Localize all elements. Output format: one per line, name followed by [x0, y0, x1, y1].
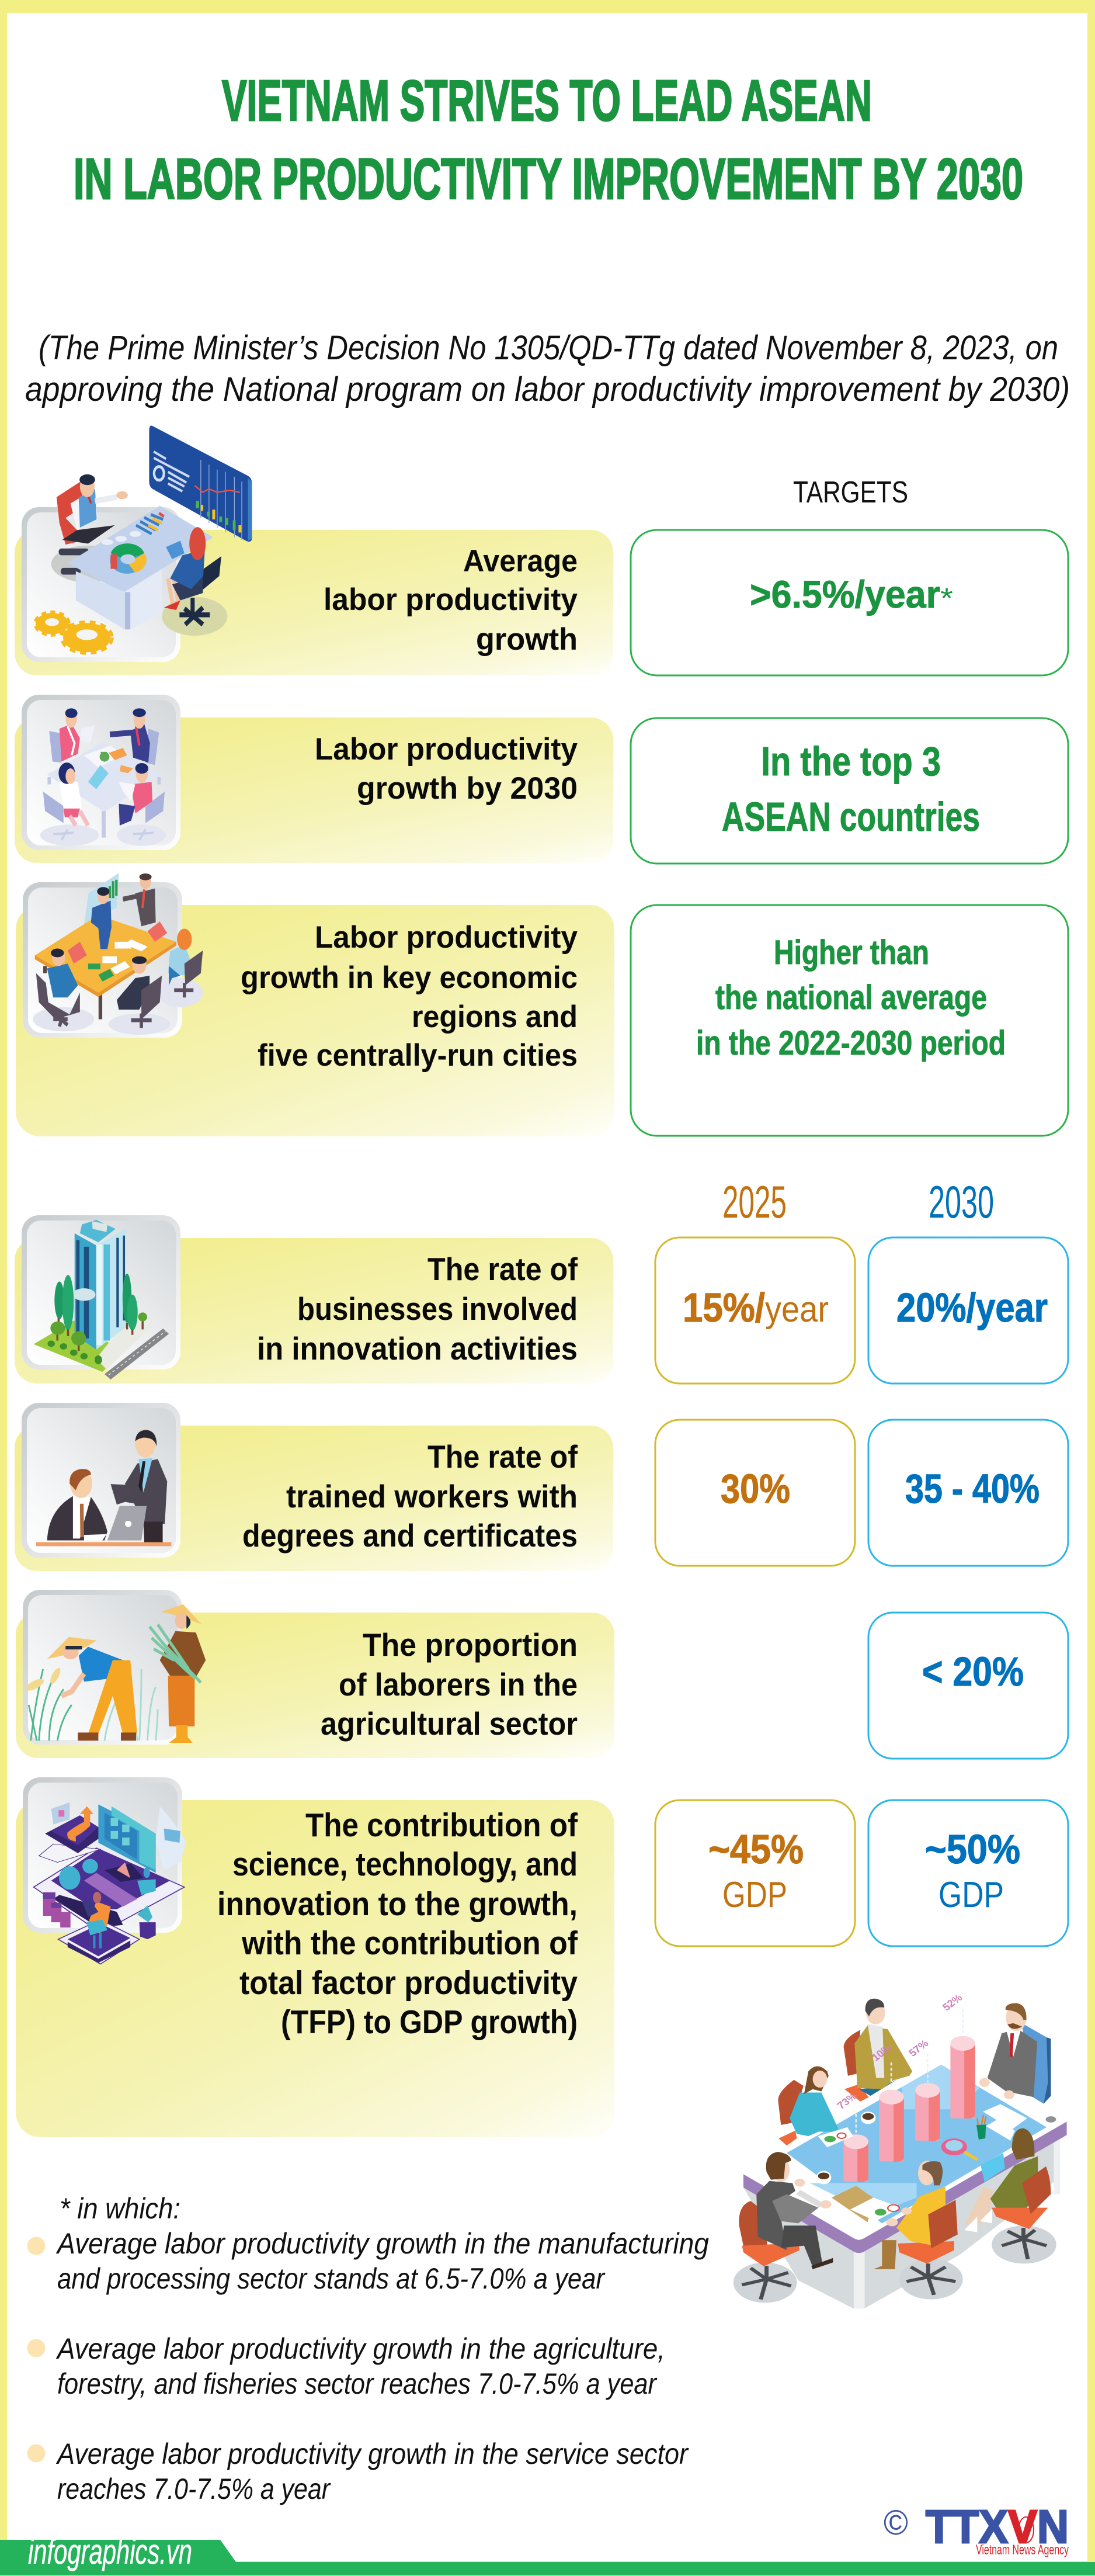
label text: The rate of — [427, 1438, 578, 1475]
target box: top 3 in ASEAN: In the top 3 — [761, 739, 941, 784]
percent labels: 10% — [868, 2043, 895, 2062]
footnote: service sector: reaches 7.0-7.5% a year — [57, 2473, 331, 2505]
footnote: agriculture sector: Average labor productivity growth in the agriculture, — [55, 2332, 665, 2365]
panel: businesses in innovation — [15, 1215, 613, 1384]
bullet — [27, 2339, 46, 2357]
value box: 15 percent per year in 2025 — [655, 1237, 855, 1384]
label text: labor productivity — [324, 583, 578, 617]
label text — [321, 1627, 578, 1742]
label text: of laborers in the — [339, 1666, 578, 1703]
column headings: 2025 and 2030 — [722, 1176, 994, 1228]
footnote: agriculture sector — [27, 2332, 665, 2400]
label text: innovation to the growth, — [217, 1885, 578, 1923]
label text: five centrally-run cities — [258, 1038, 578, 1073]
target box: over 6.5 percent — [631, 530, 1068, 675]
value box: about 50 percent GDP in 2030: ~50% — [925, 1826, 1020, 1872]
label text — [217, 1807, 578, 2041]
footer band: infographics.vn — [0, 2532, 1095, 2575]
panel: average labor productivity growth — [15, 426, 613, 675]
footnote heading: * in which: — [60, 2192, 180, 2225]
value box: 15 percent per year in 2025: year — [765, 1289, 829, 1330]
illustration: business team around data table — [734, 1992, 1067, 2308]
percent labels: 52% — [939, 1992, 965, 2012]
column headings: 2025 and 2030: 2030 — [929, 1176, 994, 1228]
data cylinders — [844, 2036, 975, 2182]
panel: laborers in agriculture — [16, 1590, 614, 1758]
footer band: infographics.vn: infographics.vn — [28, 2532, 192, 2571]
chair and man at front left — [739, 2152, 833, 2300]
label text: degrees and certificates — [242, 1517, 578, 1554]
label text — [241, 920, 578, 1073]
value box: 35 to 40 percent in 2030: 35 - 40% — [905, 1466, 1040, 1511]
label text: trained workers with — [286, 1478, 578, 1514]
chair and man at right — [979, 2003, 1051, 2104]
label text: total factor productivity — [239, 1964, 578, 2002]
icon card: digital technology platform — [23, 1777, 186, 1964]
icon card: office desk with dashboard — [22, 426, 252, 662]
percent labels: 57% — [905, 2038, 931, 2058]
footnote: manufacturing sector — [27, 2227, 709, 2295]
label text: Labor productivity — [315, 920, 578, 955]
icon card: rice farmers — [23, 1590, 206, 1745]
label text — [315, 732, 578, 806]
label text: The proportion — [363, 1627, 578, 1663]
chair and man at front — [873, 2161, 958, 2295]
value box: 30 percent in 2025: 30% — [721, 1466, 790, 1511]
label text: in innovation activities — [257, 1330, 578, 1367]
target box: over 6.5 percent: >6.5%/year — [750, 573, 940, 616]
value box: about 45 percent GDP in 2025: GDP — [722, 1875, 787, 1915]
label text: Labor productivity — [315, 732, 578, 767]
value box: about 45 percent GDP in 2025 — [655, 1800, 855, 1946]
value box: about 45 percent GDP in 2025: ~45% — [708, 1826, 804, 1872]
target box: over 6.5 percent: * — [940, 583, 953, 614]
panel: science, technology and innovation contribution — [16, 1777, 614, 2137]
label text — [324, 544, 578, 657]
label text: science, technology, and — [232, 1846, 578, 1883]
label text: agricultural sector — [321, 1705, 578, 1742]
label text — [242, 1438, 578, 1554]
chair and woman at back left — [778, 2067, 839, 2145]
column headings: 2025 and 2030: 2025 — [722, 1176, 787, 1228]
footnote: service sector: Average labor productivity growth in the service sector — [55, 2438, 689, 2470]
heading: targets: TARGETS — [793, 476, 908, 509]
label text: businesses involved — [297, 1291, 578, 1327]
logo: TTXVN Vietnam News Agency — [884, 2501, 1069, 2558]
label text: growth by 2030 — [357, 771, 578, 806]
label text: with the contribution of — [241, 1925, 578, 1962]
icon card: planning meeting at yellow table — [23, 873, 203, 1038]
subtitle: decision reference — [25, 329, 1070, 408]
chair and man at back — [844, 1999, 912, 2102]
panel: growth in key economic regions — [16, 873, 614, 1136]
label text: Average — [463, 544, 578, 578]
table items: cups, papers, magnifier, pencils — [798, 2104, 1056, 2222]
value box: under 20 percent in 2030 — [868, 1613, 1068, 1759]
percent labels: 73% — [834, 2090, 860, 2111]
target box: higher than national average — [631, 905, 1068, 1136]
label text: growth in key economic — [241, 961, 578, 995]
target box: higher than national average: Higher than — [774, 934, 929, 972]
label text: The rate of — [427, 1251, 578, 1287]
logo: TTXVN Vietnam News Agency: © — [884, 2503, 908, 2542]
label text: growth — [476, 622, 578, 657]
value box: 15 percent per year in 2025: 15%/ — [683, 1285, 765, 1330]
value box: 20 percent per year in 2030 — [868, 1237, 1068, 1384]
panel: trained workers — [15, 1403, 613, 1571]
panel: labor productivity growth by 2030 — [15, 695, 613, 863]
footnote: agriculture sector: forestry, and fisheries sector reaches 7.0-7.5% a year — [57, 2367, 658, 2400]
target box: top 3 in ASEAN — [631, 718, 1068, 864]
label text — [257, 1251, 578, 1367]
value box: 35 to 40 percent in 2030 — [868, 1420, 1068, 1566]
target box: top 3 in ASEAN: ASEAN countries — [722, 794, 980, 840]
value box: 20 percent per year in 2030: 20%/year — [896, 1285, 1048, 1330]
value box: 30 percent in 2025 — [655, 1420, 855, 1566]
chair and woman at right front — [964, 2128, 1051, 2259]
label text: The contribution of — [305, 1807, 578, 1844]
value box: under 20 percent in 2030: < 20% — [922, 1649, 1024, 1694]
percent labels — [834, 1992, 965, 2111]
logo: TTXVN Vietnam News Agency: TTXVN — [926, 2501, 1069, 2553]
footnote: service sector — [27, 2438, 689, 2505]
value box: about 50 percent GDP in 2030 — [868, 1800, 1068, 1946]
footnote: manufacturing sector: Average labor productivity growth in the manufacturing — [55, 2227, 709, 2260]
footnote: manufacturing sector: and processing sector stands at 6.5-7.0% a year — [57, 2262, 606, 2295]
bullet — [27, 2445, 46, 2462]
label text: regions and — [412, 1000, 578, 1034]
value box: about 50 percent GDP in 2030: GDP — [938, 1875, 1004, 1915]
target box: higher than national average: in the 2022-2030 period — [696, 1024, 1006, 1062]
bullet — [27, 2237, 46, 2255]
icon card: two businessmen with laptop — [22, 1403, 180, 1558]
title — [74, 68, 1023, 211]
target box: higher than national average: the national average — [715, 979, 987, 1017]
icon card: team meeting at table — [22, 695, 180, 850]
label text: (TFP) to GDP growth) — [281, 2003, 578, 2041]
icon card: office tower — [22, 1215, 180, 1379]
